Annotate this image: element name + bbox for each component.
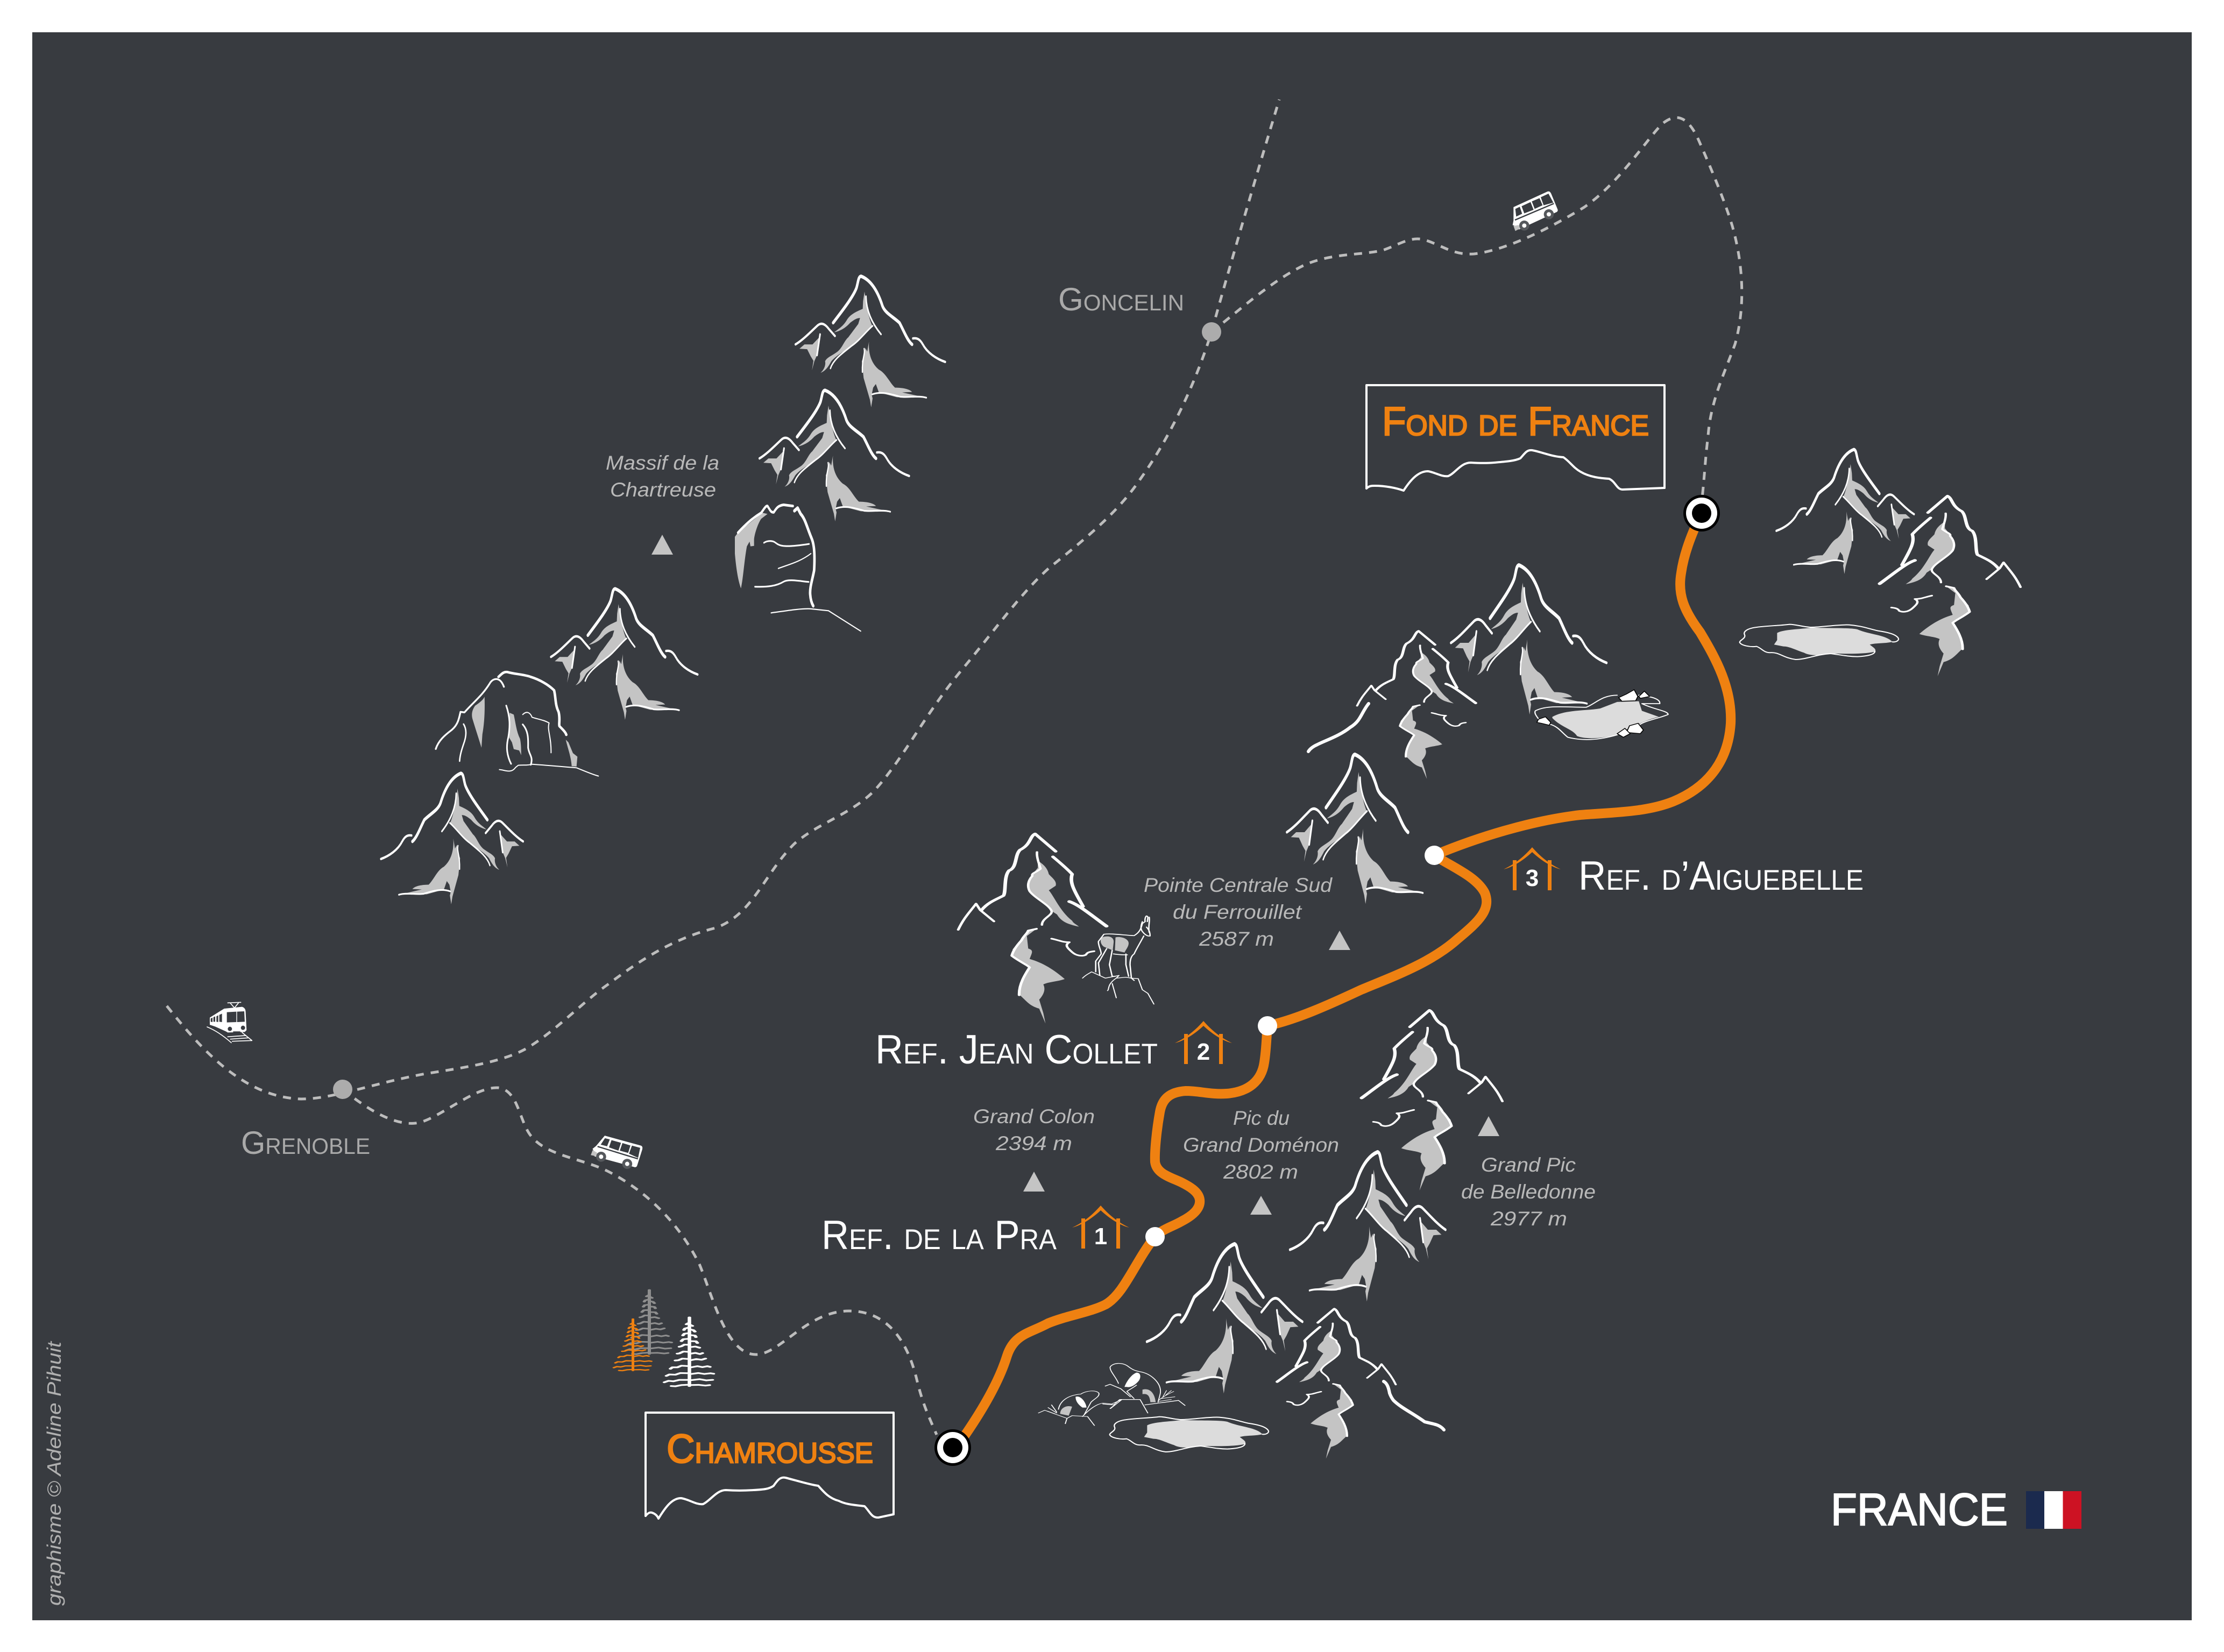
mountains: Ferrouillet upper group bbox=[1451, 565, 1606, 714]
mountains: Chartreuse third bbox=[551, 589, 698, 720]
mountain: Jean Collet peak bbox=[958, 834, 1107, 1024]
summit: Grand Pic de Belledonne: Grand Pic bbox=[1481, 1154, 1576, 1176]
stage dot: Ref. Jean Collet bbox=[1258, 1016, 1277, 1036]
summit: Grand Colon: 2394 m bbox=[995, 1132, 1072, 1154]
refuge 1: hut icon and label bbox=[821, 1206, 1129, 1258]
summit: Pic du Grand Domenon bbox=[1183, 1107, 1339, 1215]
icon: bus Chamrousse road bbox=[589, 1123, 649, 1182]
start marker: Chamrousse bbox=[934, 1429, 971, 1466]
label: Chamrousse: Chamrousse bbox=[667, 1426, 873, 1471]
mountains: Belledonne lower right bbox=[1277, 1309, 1444, 1459]
rock massif: Chartreuse upper bbox=[735, 505, 861, 631]
country label: France: FRANCE bbox=[1831, 1484, 2008, 1535]
hut number 2: 2 bbox=[1197, 1039, 1210, 1065]
animal: marmot small bbox=[1038, 1391, 1122, 1426]
label: Fond de France: Fond de France bbox=[1382, 399, 1649, 444]
summit: Grand Colon: Grand Colon bbox=[973, 1105, 1095, 1128]
lake: near marmots bbox=[1110, 1417, 1269, 1452]
icon: hut 1 bbox=[1072, 1206, 1129, 1249]
trees bbox=[614, 1290, 713, 1386]
mountains: right of Fond de France A bbox=[1776, 449, 1914, 574]
rock massif: Chartreuse lower bbox=[436, 672, 598, 776]
summit: Pic du Grand Domenon: Pic du bbox=[1233, 1107, 1290, 1129]
animal: marmot standing bbox=[1103, 1363, 1185, 1413]
label: Ref. d'Aiguebelle: Ref. d’Aiguebelle bbox=[1578, 853, 1864, 899]
summit: Massif de la Chartreuse: Massif de la bbox=[606, 452, 719, 474]
summit: Pic du Grand Domenon: 2802 m bbox=[1223, 1161, 1298, 1183]
summit: Grand Pic de Belledonne bbox=[1461, 1116, 1596, 1230]
hut number 1: 1 bbox=[1094, 1223, 1107, 1250]
mountains: Chartreuse bottom bbox=[381, 773, 523, 904]
refuge 2: hut icon and label bbox=[875, 1021, 1232, 1073]
dashed rail line Grenoble to Goncelin bbox=[167, 100, 1279, 1099]
town label: Grenoble: Grenoble bbox=[241, 1125, 370, 1161]
lake with rocks: below Fond de France bbox=[1535, 690, 1668, 740]
mountains: Chartreuse top bbox=[796, 276, 945, 407]
town label: Goncelin: Goncelin bbox=[1058, 281, 1184, 317]
summit: Massif de la Chartreuse bbox=[606, 452, 719, 555]
tree: white bbox=[664, 1317, 713, 1386]
orange hiking route bbox=[953, 512, 1731, 1452]
icon: hut 3 bbox=[1504, 847, 1561, 890]
refuge 3: hut icon and label bbox=[1504, 847, 1864, 899]
icon: French flag bbox=[2026, 1491, 2081, 1529]
town marker: Goncelin bbox=[1202, 322, 1221, 342]
summit: Pointe Centrale Sud du Ferrouillet: Pointe Centrale Sud bbox=[1144, 874, 1333, 896]
end label box: Fond de France bbox=[1366, 385, 1665, 491]
credit line: graphisme © Adeline Pihuit bbox=[43, 1341, 65, 1606]
tree: orange bbox=[614, 1319, 651, 1371]
label: Ref. Jean Collet: Ref. Jean Collet bbox=[875, 1027, 1158, 1073]
summit: Grand Pic de Belledonne: 2977 m bbox=[1490, 1208, 1567, 1230]
summit: Grand Pic de Belledonne: de Belledonne bbox=[1461, 1181, 1596, 1203]
mountains: Chartreuse second bbox=[760, 390, 909, 521]
mountains: Ferrouillet lower peak bbox=[1287, 755, 1423, 904]
icon: bus top bbox=[1513, 192, 1558, 231]
dashed bus road Grenoble to Chamrousse bbox=[343, 1088, 937, 1435]
mountains: Belledonne middle bbox=[1290, 1152, 1446, 1301]
mountains: Belledonne lower left bbox=[1147, 1244, 1302, 1393]
mountains: right of Fond de France B bbox=[1880, 496, 2021, 676]
mountains: Ferrouillet middle peak bbox=[1308, 631, 1476, 779]
tree: gray bbox=[626, 1290, 671, 1354]
icon: hut 2 bbox=[1175, 1021, 1232, 1064]
summit: Grand Colon bbox=[973, 1105, 1095, 1192]
summit: Pointe Centrale Sud du Ferrouillet: 2587 m bbox=[1199, 928, 1274, 950]
summit: Pointe Centrale Sud du Ferrouillet bbox=[1144, 874, 1350, 950]
dashed bus road Goncelin to Fond de France bbox=[1212, 118, 1742, 498]
lake: right of Fond de France bbox=[1740, 625, 1899, 660]
hut number 3: 3 bbox=[1526, 865, 1539, 891]
end marker: Fond de France bbox=[1683, 495, 1720, 531]
summit: Pic du Grand Domenon: Grand Doménon bbox=[1183, 1134, 1339, 1156]
icon: train bbox=[207, 1002, 252, 1043]
stage dot: Ref. de la Pra bbox=[1145, 1227, 1165, 1246]
animal: chamois on rock bbox=[1082, 916, 1154, 1004]
label: Ref. de la Pra: Ref. de la Pra bbox=[821, 1213, 1057, 1258]
summit: Pointe Centrale Sud du Ferrouillet: du Ferrouillet bbox=[1173, 901, 1302, 923]
stage dot: Ref. d'Aiguebelle bbox=[1425, 846, 1444, 865]
mountains: Belledonne upper bbox=[1362, 1010, 1503, 1190]
town marker: Grenoble bbox=[333, 1080, 352, 1099]
summit: Massif de la Chartreuse: Chartreuse bbox=[610, 479, 716, 501]
start label box: Chamrousse bbox=[646, 1413, 894, 1519]
